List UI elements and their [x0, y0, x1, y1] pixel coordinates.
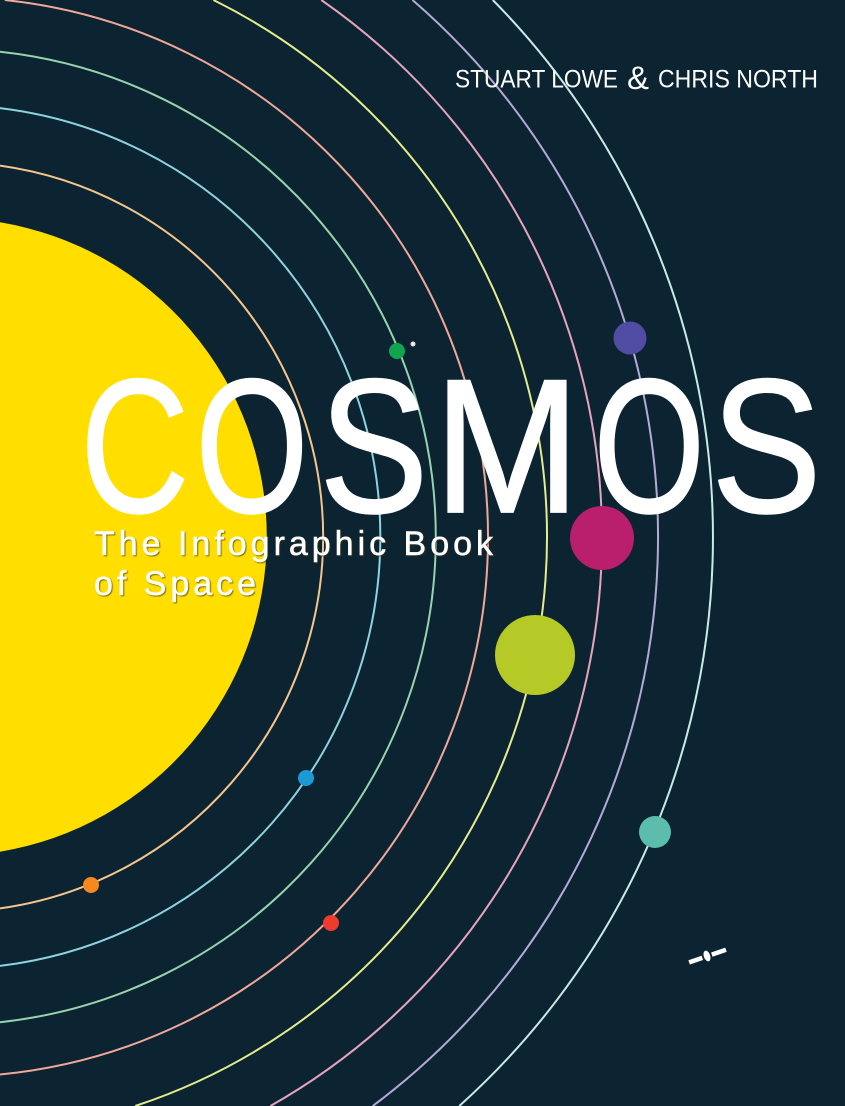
planet: earth green	[389, 343, 405, 359]
planet: jupiter lime	[495, 615, 575, 695]
planet: mars red	[323, 915, 339, 931]
title: C	[80, 340, 189, 553]
subtitle: The Infographic Book	[94, 525, 494, 563]
title: O	[594, 339, 705, 553]
planet: saturn magenta	[570, 506, 634, 570]
title: S	[319, 339, 428, 553]
title: O	[196, 339, 308, 553]
authors: CHRIS NORTH	[658, 66, 818, 94]
authors	[455, 60, 818, 96]
title: M	[434, 339, 580, 553]
planet: neptune teal	[639, 816, 671, 848]
subtitle	[94, 525, 494, 603]
icon: satellite	[687, 944, 728, 967]
title: S	[711, 339, 821, 553]
planet: uranus indigo	[614, 322, 646, 354]
planet: venus blue	[298, 770, 314, 786]
title	[80, 339, 821, 553]
moon	[410, 342, 416, 346]
subtitle: of Space	[94, 565, 256, 603]
icon: sun	[0, 222, 267, 852]
planet: mercury orange	[83, 877, 99, 893]
authors: STUART LOWE	[455, 66, 618, 94]
authors: &	[627, 60, 649, 96]
